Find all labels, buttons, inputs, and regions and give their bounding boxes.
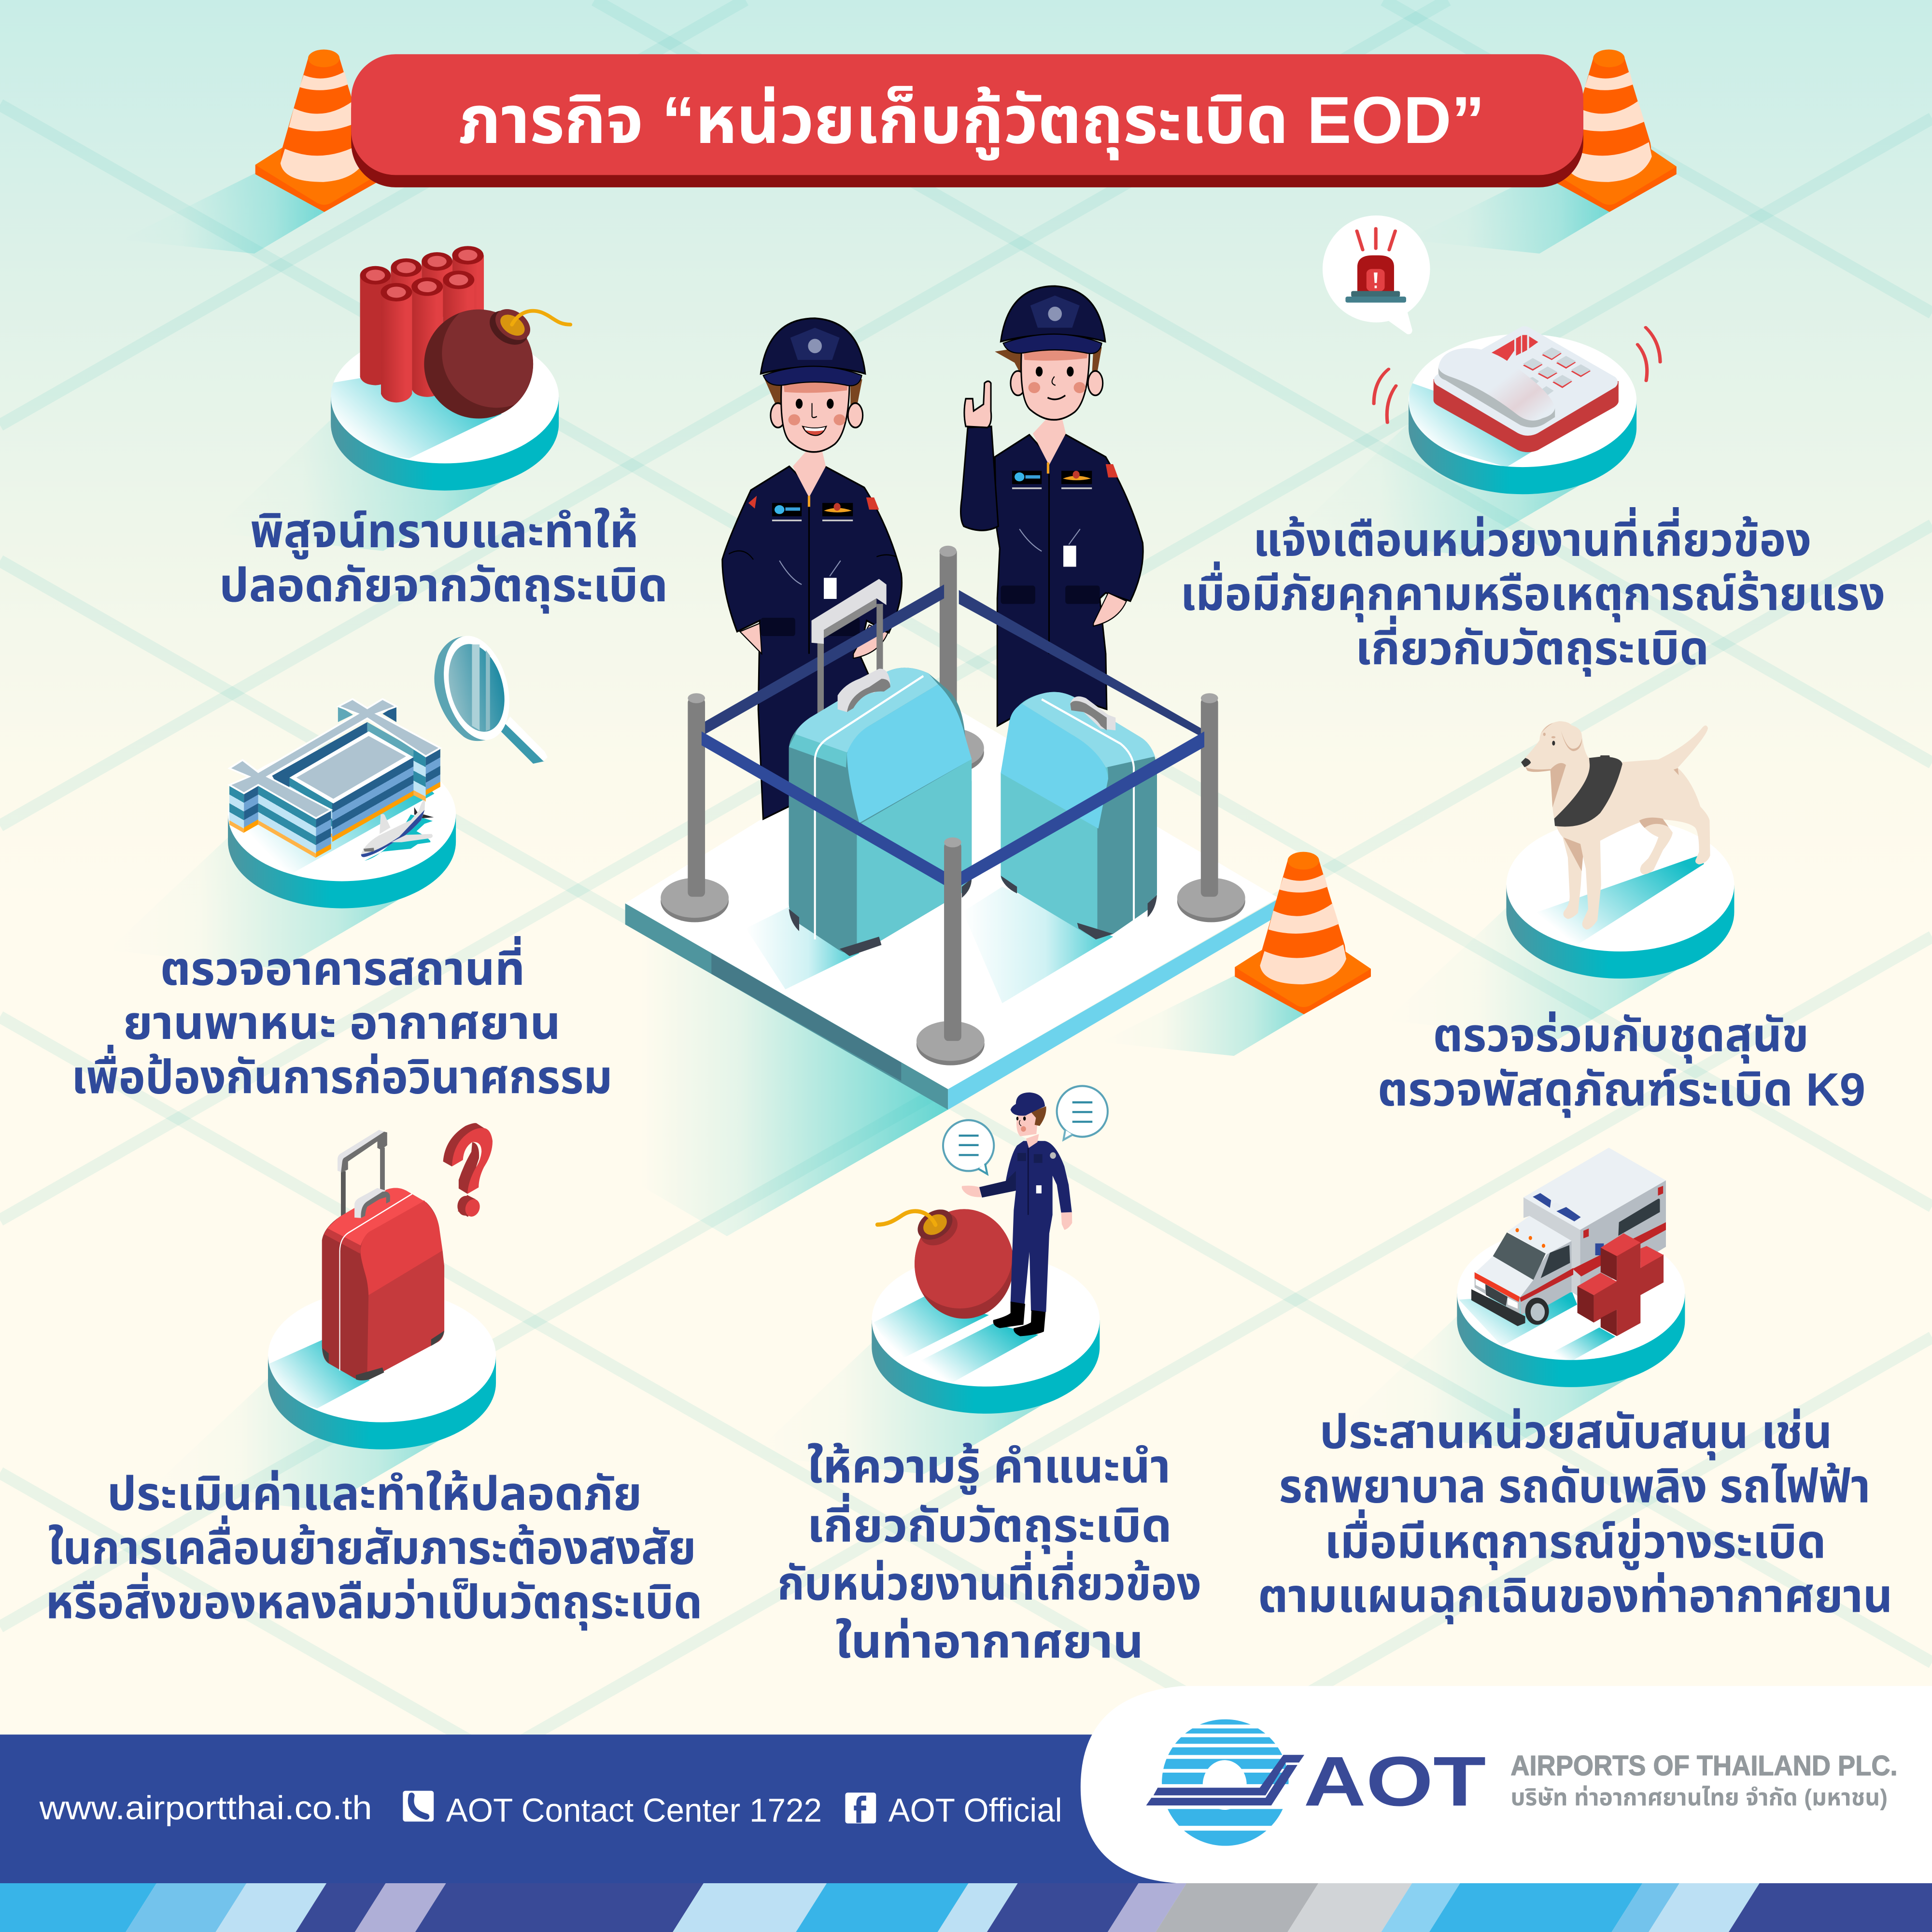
suitcase: left teal bbox=[789, 579, 972, 956]
panel: detect and neutralise bbox=[211, 246, 668, 614]
icon: red suitcase and question mark bbox=[322, 1123, 493, 1380]
platform disc bbox=[203, 750, 456, 969]
panel: inspect buildings bbox=[71, 632, 612, 1103]
text: advice bbox=[777, 1440, 1201, 1668]
bottom stripes bbox=[0, 1883, 1932, 1932]
text: assess: หรือสิ่งของหลงลืมว่าเป็นวัตถุระเบิด bbox=[45, 1572, 702, 1631]
text: coordinate: ตามแผนฉุกเฉินของท่าอากาศยาน bbox=[1258, 1570, 1892, 1625]
icon: phone bbox=[403, 1791, 434, 1821]
icon: left traffic cone bbox=[121, 49, 391, 254]
platform disc bbox=[308, 353, 559, 551]
logo wordmark: AOT bbox=[1304, 1742, 1486, 1820]
text: inspect bbox=[71, 936, 612, 1103]
text: K9: ตรวจพัสดุภัณฑ์ระเบิด K9 bbox=[1378, 1063, 1865, 1118]
left and right stanchion posts bbox=[661, 693, 1245, 922]
platform disc bbox=[148, 1289, 496, 1510]
footer blue band bbox=[0, 1734, 1232, 1884]
icon: ambulance and red cross bbox=[1471, 1148, 1666, 1336]
website: www.airportthai.co.th bbox=[39, 1789, 372, 1826]
back ropes bbox=[705, 584, 1202, 737]
back stanchion post bbox=[939, 546, 957, 740]
officer: left bbox=[722, 318, 902, 819]
text: inspect: ยานพาหนะ อากาศยาน bbox=[123, 996, 561, 1049]
platform disc bbox=[1481, 822, 1735, 1039]
text: assess bbox=[45, 1467, 702, 1631]
facebook name: AOT Official bbox=[888, 1791, 1062, 1829]
text: alert bbox=[1180, 507, 1885, 677]
panel: central EOD team scene bbox=[400, 286, 1371, 1236]
panel: coordinate support bbox=[1258, 1148, 1892, 1625]
base platform bbox=[625, 704, 1278, 1110]
text: coordinate: ประสานหน่วยสนับสนุน เช่น bbox=[1320, 1406, 1832, 1461]
text: advice: ในท่าอากาศยาน bbox=[835, 1615, 1143, 1668]
text: detect: พิสูจน์ทราบและทำให้ bbox=[250, 505, 638, 560]
platform disc bbox=[1337, 1227, 1685, 1448]
text: assess: ประเมินค่าและทำให้ปลอดภัย bbox=[107, 1467, 642, 1520]
AOT logo emblem bbox=[1146, 1719, 1304, 1846]
contact center: AOT Contact Center 1722 bbox=[446, 1791, 822, 1829]
text: advice: ให้ความรู้ คำแนะนำ bbox=[807, 1440, 1170, 1495]
officer: right bbox=[961, 286, 1143, 726]
platform disc bbox=[752, 1253, 1100, 1474]
company name english: AIRPORTS OF THAILAND PLC. bbox=[1510, 1750, 1898, 1782]
text: inspect: เพื่อป้องกันการก่อวินาศกรรม bbox=[71, 1044, 612, 1103]
back post bbox=[917, 728, 984, 774]
text: alert: แจ้งเตือนหน่วยงานที่เกี่ยวข้อง bbox=[1253, 507, 1811, 566]
icon: K9 dog bbox=[1521, 721, 1710, 929]
panel: K9 inspection bbox=[1378, 721, 1865, 1118]
logo panel bbox=[1081, 1686, 1932, 1883]
icon: airport building, plane and magnifier bbox=[229, 632, 548, 861]
icon: right traffic cone bbox=[1406, 49, 1677, 254]
text: detect: ปลอดภัยจากวัตถุระเบิด bbox=[219, 559, 668, 614]
footer bbox=[0, 1686, 1932, 1932]
icon: telephone with siren bubble bbox=[1323, 215, 1660, 452]
front ropes bbox=[702, 731, 1204, 888]
base platform shadow bbox=[400, 918, 949, 1236]
text: detect bbox=[219, 505, 668, 614]
text: coordinate: เมื่อมีเหตุการณ์ขู่วางระเบิด bbox=[1325, 1509, 1826, 1570]
suitcase: right teal bbox=[1001, 692, 1157, 939]
platform disc bbox=[1385, 334, 1637, 554]
title banner bbox=[351, 54, 1583, 187]
icon: dynamite and bomb bbox=[360, 246, 570, 419]
icon: facebook bbox=[845, 1792, 876, 1823]
text: coordinate: รถพยาบาล รถดับเพลิง รถไฟฟ้า bbox=[1279, 1460, 1870, 1512]
text: assess: ในการเคลื่อนย้ายสัมภาระต้องสงสัย bbox=[48, 1515, 696, 1574]
icon: traffic cone on platform bbox=[1101, 852, 1371, 1056]
company name thai: บริษัท ท่าอากาศยานไทย จำกัด (มหาชน) bbox=[1510, 1785, 1888, 1811]
text: advice: กับหน่วยงานที่เกี่ยวข้อง bbox=[777, 1551, 1201, 1610]
title: ภารกิจ “หน่วยเก็บกู้วัตถุระเบิด EOD” bbox=[458, 83, 1485, 160]
text: inspect: ตรวจอาคารสถานที่ bbox=[160, 936, 525, 995]
panel: give knowledge and advice bbox=[752, 1086, 1201, 1668]
text: alert: เกี่ยวกับวัตถุระเบิด bbox=[1355, 615, 1709, 677]
panel: assess suspicious baggage bbox=[45, 1123, 702, 1631]
text: advice: เกี่ยวกับวัตถุระเบิด bbox=[807, 1493, 1172, 1554]
icon: officer with bomb bbox=[877, 1086, 1108, 1336]
front stanchion post bbox=[917, 838, 985, 1065]
text: K9: ตรวจร่วมกับชุดสุนัข bbox=[1433, 1009, 1809, 1064]
text: K9 bbox=[1378, 1009, 1865, 1118]
text: alert: เมื่อมีภัยคุกคามหรือเหตุการณ์ร้ายแรง bbox=[1180, 561, 1885, 623]
text: coordinate bbox=[1258, 1406, 1892, 1625]
panel: alert units bbox=[1180, 215, 1885, 677]
